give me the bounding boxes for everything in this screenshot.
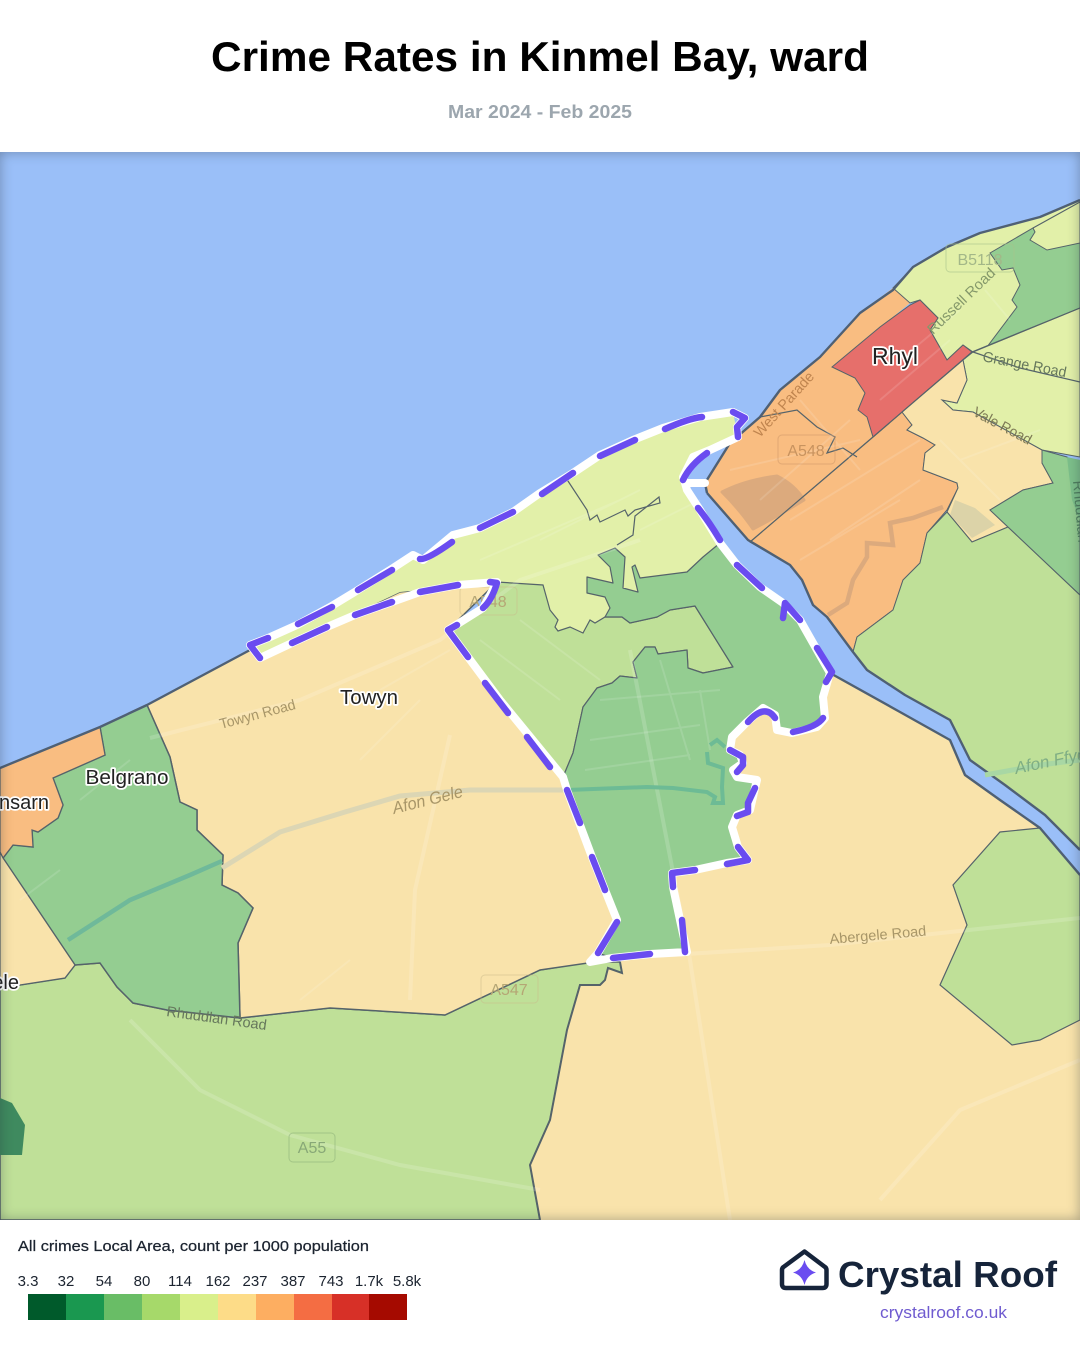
legend values: 743 [318,1273,344,1290]
road badge: A55 [289,1133,335,1162]
logo icon: house with star [782,1252,826,1288]
area: south-east tan [530,673,1080,1220]
river Afon Ffyd [985,760,1080,775]
road labels: Vale Road [970,404,1034,449]
legend values: 114 [168,1273,192,1290]
road labels: Abergele Road [829,924,927,948]
town labels: Belgrano [86,767,168,789]
area: ward yellow-green [250,412,738,658]
ward internal boundary [566,478,660,545]
legend colour scale [28,1294,407,1320]
area: Rhyl north-east yellow [893,200,1080,360]
road labels: Rhuddlan Road [165,1004,268,1034]
divider lines in Rhyl [750,202,1080,542]
legend values: 32 [58,1273,74,1290]
area: east green [990,450,1080,595]
area: east green patch [940,828,1080,1045]
area: NE green [987,228,1080,347]
area: Abergele edge [0,852,75,987]
area: ward mid green [448,582,733,777]
legend values: 54 [96,1273,112,1290]
road badge: A548 Rhyl: A548 [787,443,825,460]
town labels: Rhyl [872,343,918,369]
street network [20,290,1040,1000]
choropleth map [0,152,1080,1220]
road labels: Russell Road [925,265,999,338]
area: Rhyl central red [832,300,972,437]
area: Belgrano [3,705,253,1018]
town labels: Towyn [340,687,398,709]
Rhyl internal boundary [760,410,857,457]
legend values [18,1273,422,1290]
title: Crime Rates in Kinmel Bay, ward [211,33,869,80]
legend values: 80 [134,1273,150,1290]
town labels [0,343,918,994]
area: dark green patch [0,1098,25,1155]
road labels: Grange Road [981,349,1068,381]
river Afon Gele in ward [567,740,725,803]
river Afon Gele [222,790,565,868]
farmland edge outline [530,962,622,1220]
road labels [165,265,1080,1034]
area: east tan [902,360,1053,542]
road badge: A548 Towyn [460,587,517,615]
website url: crystalroof.co.uk [880,1304,1008,1322]
legend title: All crimes Local Area, count per 1000 population [18,1238,369,1255]
legend values: 162 [205,1273,231,1290]
road badge: A547: A547 [490,982,528,999]
area: Rhyl south orange [750,412,958,652]
road badge: B5118 [946,244,1014,272]
area: east yellow [942,308,1080,457]
area: Rhyl west orange [705,288,910,542]
road badge: A55: A55 [298,1140,326,1157]
road network [130,540,1080,1220]
map edge shadow [0,152,1080,1220]
area: south-west farmland [0,962,622,1220]
legend values: 5.8k [393,1273,422,1290]
legend values: 237 [242,1273,268,1290]
road badge: A547 [481,975,538,1003]
grey patch [950,500,995,538]
area: Pensarn [0,727,105,858]
road labels: West Parade [751,369,818,441]
area: ward green [563,543,830,958]
area: east mid green [853,512,1080,850]
ward boundary: purple dashes [250,412,832,958]
road badge: A548 Rhyl [778,435,835,464]
road badge: B5118: B5118 [957,252,1003,269]
subtitle: date range: Mar 2024 - Feb 2025 [448,102,632,122]
area: east dark green [1067,457,1080,520]
legend values: 1.7k [355,1273,384,1290]
legend values: 387 [280,1273,306,1290]
coast outline [0,200,1080,875]
area: Towyn [147,582,617,1018]
ward boundary: white line [250,412,830,962]
legend values: 3.3 [18,1273,38,1290]
river in Belgrano [68,861,222,940]
road labels: Afon Gele [389,782,465,818]
road labels: Towyn Road [218,697,297,733]
sea [0,152,1080,962]
river in Rhyl [828,507,943,615]
logo wordmark: Crystal Roof [838,1254,1058,1295]
park patch [722,476,804,529]
road badge: A548 Towyn: A548 [469,594,507,611]
